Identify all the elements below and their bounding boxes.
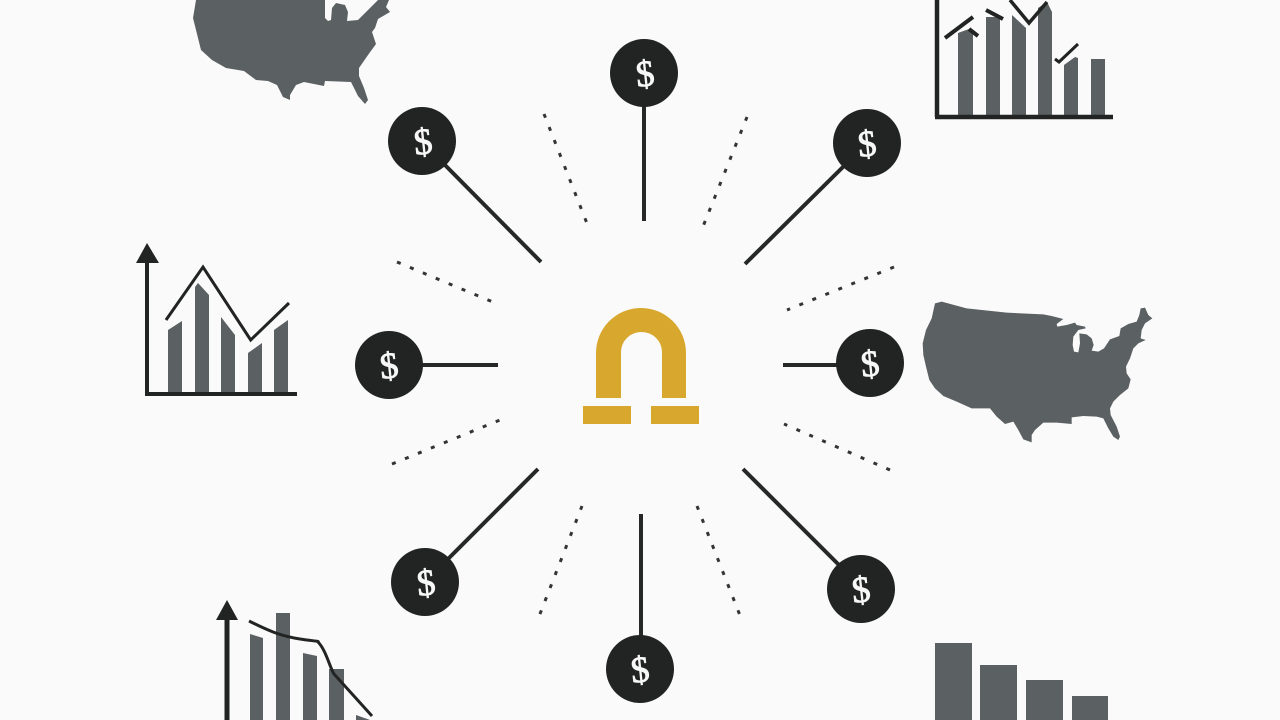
- dollar pin: bottom left: [391, 469, 538, 616]
- icon: central gold magnet: [583, 308, 699, 424]
- dollar pin: bottom right: [743, 469, 895, 623]
- dollar pin: left: $: [378, 345, 400, 388]
- dollar pin: top: $: [634, 53, 656, 96]
- chart: bottom right descending bars: [935, 643, 1108, 720]
- dollar pin: top right: $: [856, 123, 878, 166]
- dollar pin: top right: [745, 109, 901, 264]
- dollar pin: bottom left: $: [415, 562, 437, 605]
- chart: left bars with trend line: [136, 243, 297, 394]
- dollar pin: top left: $: [412, 121, 434, 164]
- chart: top right bars with trend line: [935, 0, 1113, 117]
- dollar pin: top left: [388, 107, 541, 262]
- dollar pin: bottom: [606, 514, 674, 703]
- dollar pin: bottom right: $: [850, 569, 872, 612]
- dotted radial rays: [392, 114, 894, 619]
- dollar pin: right: $: [859, 343, 881, 386]
- chart: bottom left bars with falling line: [216, 600, 372, 720]
- dollar pin: top: [610, 39, 678, 221]
- map: USA right: [923, 302, 1152, 442]
- dollar pin: right: [783, 329, 904, 397]
- map: USA top left: [193, 0, 390, 104]
- dollar pin: left: [355, 331, 498, 399]
- dollar pin: bottom: $: [629, 649, 651, 692]
